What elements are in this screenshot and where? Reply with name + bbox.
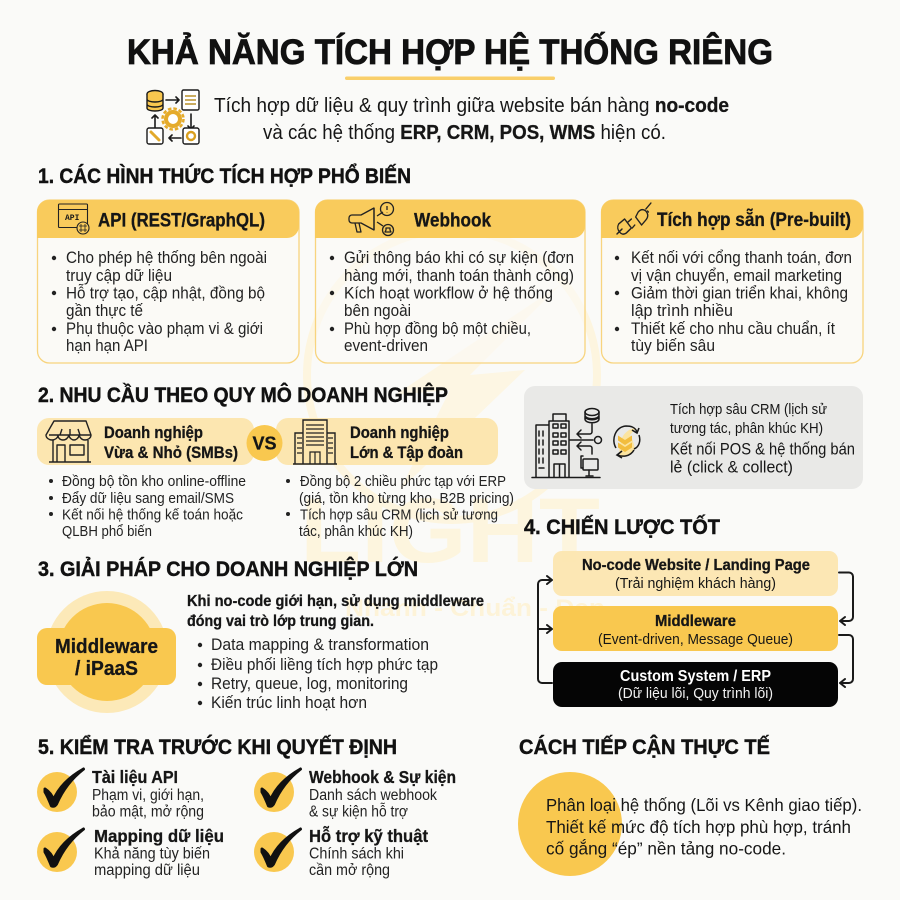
bullet list: Phù hợp đồng bộ một chiều, [344, 320, 531, 338]
title: KHẢ NĂNG TÍCH HỢP HỆ THỐNG RIÊNG [127, 32, 773, 72]
bullet list: hạn hạn API [66, 337, 148, 355]
check item: API docs [37, 767, 204, 820]
arrow: middleware to custom system [839, 635, 853, 687]
bullet list: Giảm thời gian triển khai, không [631, 284, 848, 302]
pill text [350, 424, 463, 462]
list: SMB needs [49, 473, 246, 540]
panel: Pre-built [601, 200, 863, 363]
icon: megaphone [349, 202, 394, 236]
list: middleware capabilities: Retry, queue, log, monitoring [211, 674, 408, 693]
badge: VS: VS [252, 434, 276, 454]
icon: office towers [293, 420, 337, 464]
layer: custom system [553, 662, 838, 707]
list: middleware capabilities: Điều phối liềng tích hợp phức tạp [211, 655, 438, 674]
title underline [345, 76, 555, 80]
list: enterprise needs: (giá, tồn kho từng kho, B2B pricing) [299, 490, 514, 507]
heading: section 4: 4. CHIẾN LƯỢC TỐT [524, 513, 720, 539]
bullet list: Cho phép hệ thống bên ngoài [66, 249, 267, 267]
check item: webhook [254, 767, 456, 820]
icon: API window: API [65, 214, 80, 223]
card header text: Webhook [414, 210, 491, 232]
bullet list [52, 249, 267, 355]
arrow: website to middleware [839, 572, 853, 625]
list: SMB needs: Kết nối hệ thống kế toán hoặc [62, 506, 243, 524]
list: middleware capabilities [198, 635, 438, 712]
diagram: strategy layers [538, 551, 853, 707]
check item: technical support [254, 825, 428, 879]
watermark: lightning logo and wordmark [300, 230, 605, 622]
list: enterprise needs: Đồng bộ 2 chiều phức tạp với ERP [300, 473, 506, 490]
panel: API [37, 200, 299, 363]
bullet list [330, 249, 574, 355]
check item: data mapping [37, 826, 224, 879]
icon: building with connections [532, 408, 602, 478]
pill text: Doanh nghiệp [350, 424, 449, 442]
pill text: Doanh nghiệp [104, 424, 203, 442]
pill text [104, 424, 238, 462]
check item: data mapping: Khả năng tùy biến [94, 846, 210, 862]
badge: Middleware / iPaaS: Middleware [55, 635, 158, 658]
bullet list: gần thực tế [66, 302, 143, 320]
check item: data mapping: Mapping dữ liệu [94, 826, 224, 846]
bullet list: vị vận chuyển, email marketing [631, 267, 842, 285]
panel: SMB pill [37, 418, 254, 465]
layer: middleware [553, 606, 838, 651]
list: SMB needs: QLBH phổ biến [62, 523, 152, 540]
check item: technical support: Chính sách khi [309, 846, 404, 862]
icon: integration cycle [147, 90, 199, 144]
list: middleware capabilities: Kiến trúc linh hoạt hơn [211, 693, 367, 712]
callout: practical approach: Phân loại hệ thống (Lõi vs Kênh giao tiếp). [546, 795, 862, 815]
arrow: custom system back to upper layers [538, 576, 552, 683]
bullet list: event-driven [344, 337, 428, 355]
text: middleware description [187, 593, 484, 630]
watermark: lightning logo and wordmark: Nhanh - Chuẩn - Đẹp [345, 595, 605, 622]
list: enterprise needs: Tích hợp sâu CRM (lịch sử tương [300, 506, 498, 524]
pill text: Lớn & Tập đoàn [350, 444, 463, 462]
heading: section 5: 5. KIỂM TRA TRƯỚC KHI QUYẾT ĐỊNH [38, 734, 397, 759]
bullet list: Hỗ trợ tạo, cập nhật, đồng bộ [66, 284, 265, 302]
list: SMB needs: Đồng bộ tồn kho online-offline [62, 473, 246, 490]
text: middleware description: đóng vai trò lớp trung gian. [187, 613, 374, 630]
check item: webhook: Danh sách webhook [309, 787, 437, 804]
check item: technical support: cần mở rộng [309, 862, 390, 879]
subtitle: và các hệ thống ERP, CRM, POS, WMS hiện có. [263, 122, 666, 144]
text: middleware description: Khi no-code giới hạn, sử dụng middleware [187, 593, 484, 610]
summary text: lẻ (click & collect) [670, 458, 793, 476]
bullet list: Kích hoạt workflow ở hệ thống [344, 284, 553, 302]
callout: practical approach [518, 772, 862, 876]
bullet list: lập trình nhiều [631, 302, 733, 320]
subtitle [214, 95, 729, 144]
bullet list: tùy biến sâu [631, 337, 715, 355]
check item: API docs: bảo mật, mở rộng [92, 804, 204, 820]
bullet list [615, 249, 852, 355]
bullet list: Thiết kế cho nhu cầu chuẩn, ít [631, 320, 835, 338]
pill text: Vừa & Nhỏ (SMBs) [104, 444, 238, 462]
card header text: Tích hợp sẵn (Pre-built) [657, 207, 851, 231]
bullet list: bên ngoài [344, 302, 411, 320]
summary text: Kết nối POS & hệ thống bán [670, 440, 855, 458]
icon: sync arrows [614, 426, 640, 458]
summary text: tương tác, phân khúc KH) [670, 421, 823, 437]
list: enterprise needs [286, 473, 514, 540]
summary text [670, 402, 855, 476]
icon: store [46, 421, 91, 462]
heading: section 2: 2. NHU CẦU THEO QUY MÔ DOANH NGHIỆP [38, 382, 448, 407]
bullet list: Kết nối với cổng thanh toán, đơn [631, 249, 852, 267]
heading: section 3: 3. GIẢI PHÁP CHO DOANH NGHIỆP LỚN [38, 556, 418, 581]
callout: practical approach: Thiết kế mức độ tích hợp phù hợp, tránh [546, 817, 851, 837]
list: middleware capabilities: Data mapping & transformation [211, 635, 429, 654]
subtitle: Tích hợp dữ liệu & quy trình giữa website bán hàng no-code [214, 95, 729, 117]
check item: webhook: & sự kiện hỗ trợ [309, 804, 408, 820]
layer: no-code website [553, 551, 838, 596]
layer: middleware: (Event-driven, Message Queue) [598, 631, 793, 648]
check item: data mapping: mapping dữ liệu [94, 862, 200, 879]
bullet list: Phụ thuộc vào phạm vi & giới [66, 320, 263, 338]
badge: VS [246, 425, 282, 461]
layer: custom system: (Dữ liệu lõi, Quy trình lõi) [618, 685, 773, 702]
bullet list: truy cập dữ liệu [66, 267, 172, 285]
check item: API docs: Phạm vi, giới hạn, [92, 787, 204, 804]
layer: custom system: Custom System / ERP [620, 668, 771, 685]
panel: Webhook [315, 200, 585, 363]
check item: technical support: Hỗ trợ kỹ thuật [309, 825, 428, 846]
layer: middleware: Middleware [655, 613, 736, 630]
list: enterprise needs: tác, phân khúc KH) [299, 523, 413, 540]
bullet list: Gửi thông báo khi có sự kiện (đơn [344, 249, 574, 267]
panel: enterprise integration summary [524, 386, 863, 489]
callout: practical approach: cố gắng “ép” nền tảng no-code. [546, 838, 786, 858]
heading: section 1: 1. CÁC HÌNH THỨC TÍCH HỢP PHỔ BIẾN [38, 163, 411, 188]
badge: Middleware / iPaaS: / iPaaS [75, 657, 138, 680]
watermark: lightning logo and wordmark: LIGHT [300, 480, 600, 582]
badge: Middleware / iPaaS [37, 591, 176, 713]
bullet list: hàng mới, thanh toán thành công) [344, 267, 574, 285]
icon: plug [617, 203, 651, 234]
heading: practical approach: CÁCH TIẾP CẬN THỰC TẾ [519, 734, 770, 759]
check item: API docs: Tài liệu API [92, 767, 178, 787]
check item: webhook: Webhook & Sự kiện [309, 767, 456, 787]
layer: no-code website: No-code Website / Landing Page [582, 557, 810, 574]
summary text: Tích hợp sâu CRM (lịch sử [670, 402, 827, 418]
card header text: API (REST/GraphQL) [98, 210, 265, 232]
list: SMB needs: Đẩy dữ liệu sang email/SMS [62, 490, 234, 507]
layer: no-code website: (Trải nghiệm khách hàng) [615, 575, 776, 592]
icon: API window [58, 204, 89, 234]
panel: enterprise pill [276, 418, 498, 465]
